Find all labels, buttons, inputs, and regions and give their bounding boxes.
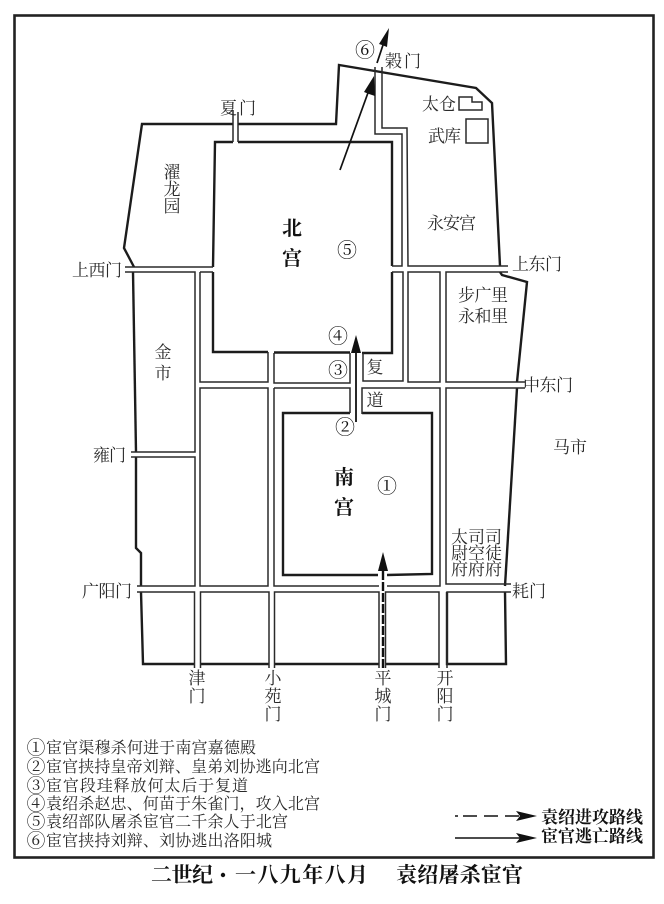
place labels: [154, 95, 587, 579]
event number markers: ⑥: [355, 39, 375, 62]
gate labels: 平: [374, 669, 392, 688]
gate labels: 城: [374, 687, 392, 706]
event list: 宦官挟持皇帝刘辩、皇弟刘协逃向北宫: [46, 758, 320, 776]
event list: [26, 737, 320, 852]
icon: granary building: [459, 97, 482, 110]
arrow: eunuch escape route 6: [340, 28, 389, 170]
place labels: 龙: [164, 180, 180, 199]
south palace wall: [283, 413, 432, 575]
event list: ⑤: [26, 811, 46, 833]
event number markers: ②: [335, 416, 355, 439]
icon: armoury building: [466, 119, 488, 143]
title: [151, 863, 523, 887]
place labels: 永和里: [458, 307, 508, 326]
gate labels: 津: [188, 669, 206, 688]
event list: 宦官段珪释放何太后于复道: [46, 777, 248, 795]
route legend: [455, 807, 643, 846]
place labels: 太仓: [422, 95, 456, 114]
event list: 宦官渠穆杀何进于南宫嘉德殿: [46, 739, 256, 757]
south palace label: 宫: [334, 495, 354, 519]
legend: attack route: 袁绍进攻路线: [541, 807, 643, 827]
legend: escape route: 宦官逃亡路线: [541, 826, 643, 846]
event list: ①: [26, 737, 46, 759]
gate labels: 雍门: [93, 446, 126, 465]
gate labels: [72, 52, 573, 724]
gate labels: 上西门: [72, 261, 122, 280]
place labels: 金: [154, 343, 172, 362]
gate labels: 门: [188, 687, 206, 706]
place labels: 尉空徒: [451, 544, 502, 563]
event list: ④: [26, 793, 46, 815]
city map: [72, 28, 587, 724]
gate labels: 上东门: [512, 255, 562, 274]
event number markers: ①: [377, 475, 397, 498]
place labels: 园: [164, 197, 180, 216]
gate labels: 苑: [264, 687, 282, 706]
event list: ⑥: [26, 830, 46, 852]
place labels: 武库: [428, 127, 461, 146]
gate labels: 开: [436, 669, 454, 688]
legend: escape route: [455, 826, 643, 846]
event number markers: [328, 39, 397, 498]
gate labels: 榖门: [385, 52, 421, 71]
south palace label: 南: [334, 466, 354, 489]
place labels: 府府府: [451, 560, 502, 579]
place labels: 复: [366, 358, 384, 377]
north palace wall: [213, 142, 392, 353]
event list: 袁绍杀赵忠、何苗于朱雀门，攻入北宫: [46, 794, 320, 813]
title: 袁绍屠杀宦官: [396, 863, 523, 887]
place labels: 马市: [553, 438, 587, 457]
event list: 宦官挟持刘辩、刘协逃出洛阳城: [46, 832, 272, 850]
north palace label: 宫: [282, 246, 302, 270]
place labels: 道: [366, 391, 384, 410]
gate labels: 夏门: [220, 99, 256, 118]
place labels: 步广里: [458, 286, 508, 305]
gate labels: 阳: [436, 687, 454, 706]
arrow: eunuch escape route 2 to 4: [351, 335, 361, 422]
north palace label: 北: [282, 217, 302, 240]
roads and wards: [125, 67, 525, 668]
event list: ③: [26, 775, 46, 797]
title: 一八九年八月: [235, 863, 368, 887]
gate labels: 小: [264, 669, 282, 688]
event number markers: ③: [328, 359, 348, 382]
gate labels: 耗门: [512, 582, 546, 601]
event list: ②: [26, 756, 46, 778]
arrow: Yuan Shao attack route: [378, 552, 388, 668]
gate labels: 门: [436, 705, 454, 724]
event list: 袁绍部队屠杀宦官二千余人于北宫: [46, 812, 288, 831]
title: 二世纪: [151, 863, 213, 887]
place labels: 市: [154, 364, 172, 383]
event number markers: ⑤: [337, 239, 357, 262]
place labels: 永安宫: [427, 214, 476, 233]
gate labels: 门: [264, 705, 282, 724]
legend: attack route: [455, 807, 643, 827]
outer city wall and palace walls: [124, 65, 527, 664]
gate labels: 广阳门: [82, 582, 132, 601]
gate labels: 中东门: [523, 376, 573, 395]
gate labels: 门: [374, 705, 392, 724]
place labels: 濯: [164, 163, 180, 182]
place labels: 太司司: [451, 528, 502, 547]
event number markers: ④: [328, 325, 348, 348]
